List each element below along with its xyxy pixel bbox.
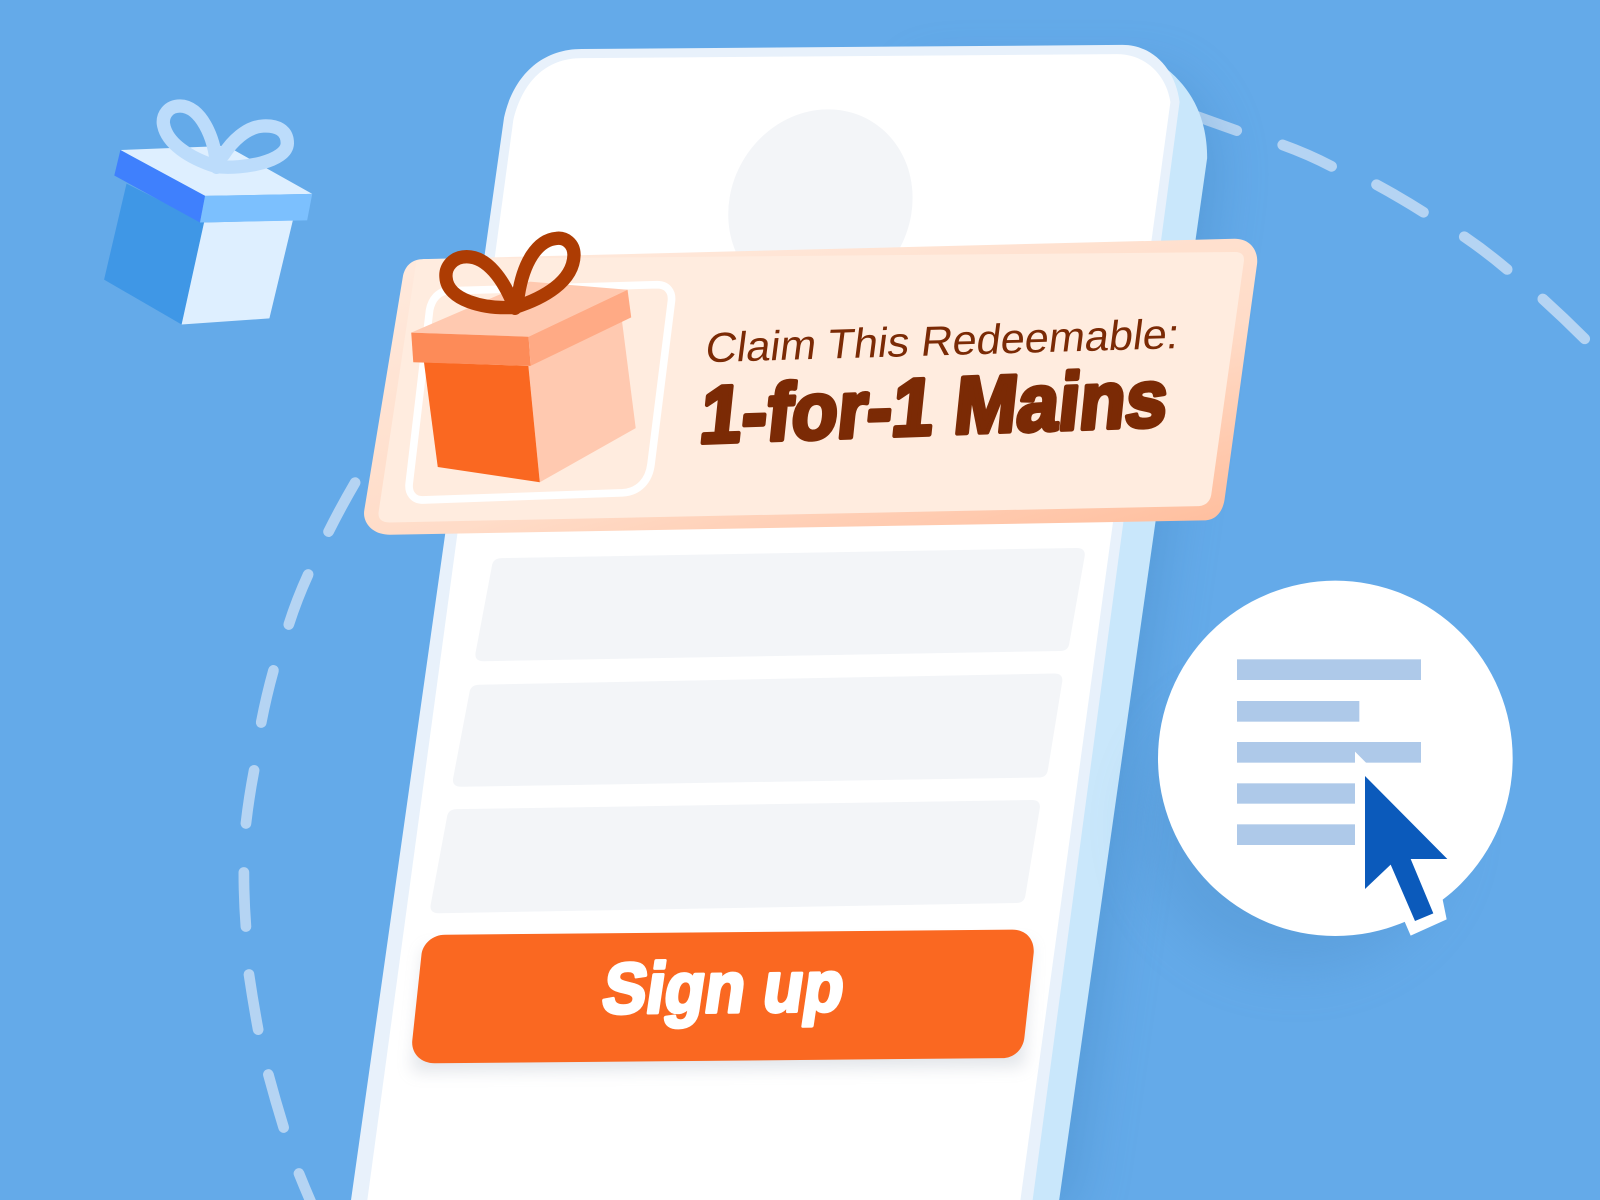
lid top xyxy=(120,146,312,196)
banner xyxy=(364,238,1257,535)
circle shadow xyxy=(1143,684,1449,969)
white circle xyxy=(1158,581,1513,936)
dashed path: right arc xyxy=(1194,115,1585,339)
sign up label: Sign up xyxy=(598,947,850,1029)
image placeholder xyxy=(693,76,948,337)
lid top xyxy=(411,282,628,337)
lid left face xyxy=(114,150,205,222)
phone frame xyxy=(351,45,1180,1200)
box right face xyxy=(528,321,636,482)
ribbon bow xyxy=(163,106,287,167)
list selection icon xyxy=(1158,581,1513,936)
list line 2 xyxy=(1237,701,1359,722)
list line 4 xyxy=(1237,783,1355,804)
list line 3 xyxy=(1237,742,1421,763)
box left face xyxy=(104,184,204,324)
list line 1 xyxy=(1237,659,1421,680)
box right face xyxy=(182,220,293,324)
ribbon bow xyxy=(446,238,574,308)
cursor outline xyxy=(1355,752,1473,936)
list line 5 xyxy=(1237,824,1355,845)
phone screen xyxy=(367,54,1170,1200)
small gift box xyxy=(104,106,312,324)
phone xyxy=(351,45,1207,1200)
sign up button xyxy=(412,930,1034,1063)
gift tile outline xyxy=(409,285,672,500)
banner subtitle: Claim This Redeemable: xyxy=(703,310,1182,371)
phone back edge xyxy=(714,59,1207,1200)
banner face xyxy=(378,252,1244,522)
phone shadow xyxy=(816,77,1214,1200)
sign up button shadow xyxy=(412,944,1031,1071)
lid left face xyxy=(411,333,531,366)
banner headline: 1-for-1 Mains xyxy=(696,354,1172,461)
box left face xyxy=(424,362,540,482)
lid right face xyxy=(529,290,631,366)
form field 1 xyxy=(475,548,1085,661)
lid right face xyxy=(200,194,312,222)
banner edge xyxy=(364,239,1257,535)
cursor arrow xyxy=(1365,776,1447,921)
dashed path: left arc xyxy=(244,483,355,1200)
form field 3 xyxy=(431,800,1040,913)
form field 2 xyxy=(453,673,1062,787)
large gift box xyxy=(411,238,636,482)
